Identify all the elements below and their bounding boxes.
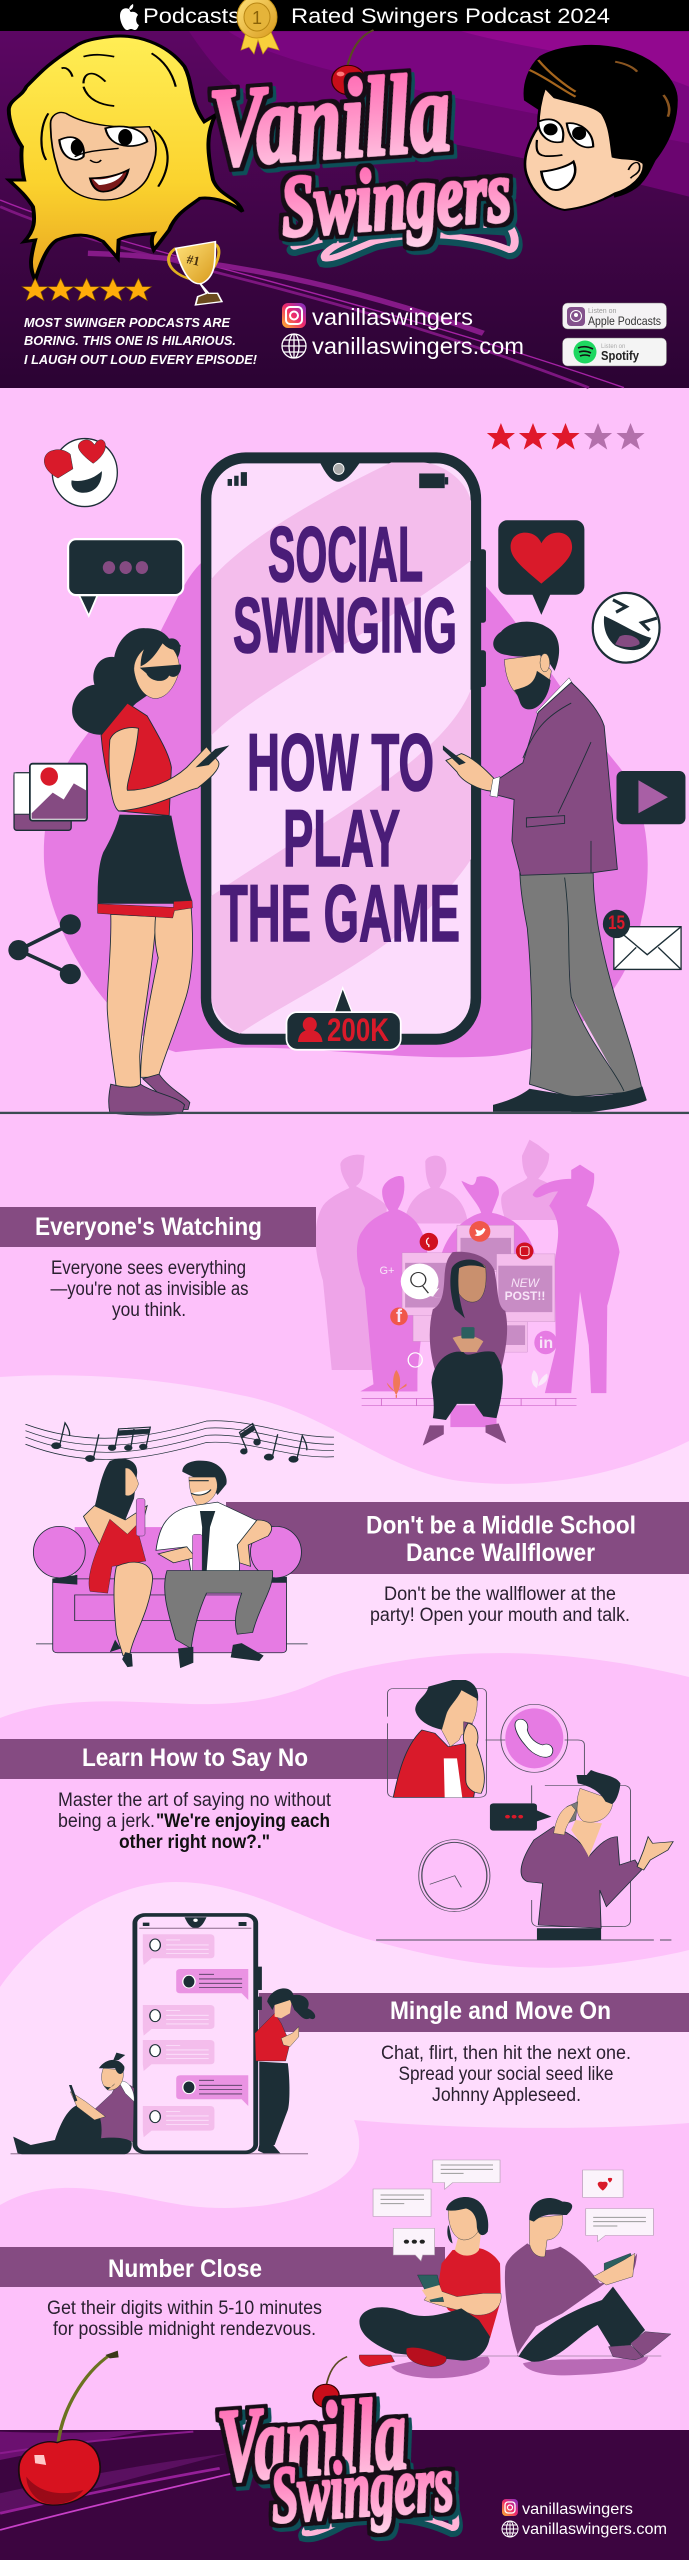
pink blob (44, 552, 648, 1057)
phone (135, 1915, 262, 2152)
body text: other right now?." (119, 1832, 270, 1853)
hero title: HOW TO (247, 718, 434, 808)
man on sofa (156, 1461, 273, 1668)
legs (107, 914, 156, 1089)
logo word: Swingers: Swingers (278, 143, 514, 256)
typing bubble (490, 1803, 551, 1831)
black award bar (0, 0, 689, 31)
logo word: Swingers: Swingers (268, 2439, 456, 2540)
body text: Get their digits within 5-10 minutes (47, 2298, 322, 2319)
hooded girl (423, 1252, 507, 1446)
body text (47, 2298, 322, 2340)
heading band: Everyone's Watching (0, 1207, 316, 1247)
icon: social bubbles (390, 1221, 557, 1367)
body text: Spread your social seed like (398, 2064, 614, 2085)
follower badge (286, 988, 401, 1050)
text: website: vanillaswingers.com (522, 2521, 667, 2538)
hand and phone (446, 754, 494, 791)
woman (359, 2197, 501, 2367)
icon: big cherry (19, 2351, 119, 2505)
text: instagram handle: vanillaswingers (312, 304, 473, 330)
badge: Apple Podcasts (562, 303, 666, 329)
panel: Number Close (0, 2160, 671, 2378)
panel: Wallflower (25, 1421, 689, 1668)
icon: typing bubble (68, 539, 183, 616)
woman figure (72, 628, 229, 1115)
illustration: couple on sofa with music (25, 1421, 334, 1668)
logo cherry (313, 2357, 347, 2408)
body text: Don't be the wallflower at the (384, 1584, 616, 1605)
body text: party! Open your mouth and talk. (370, 1605, 630, 1626)
icon: share (8, 914, 81, 984)
shirt collar (536, 678, 573, 717)
icon: video play (616, 771, 685, 824)
top (101, 703, 171, 816)
icon: globe (502, 2521, 518, 2537)
panel: Learn How to Say No (0, 1680, 673, 1940)
logo swoosh (281, 2504, 456, 2537)
hero title (220, 510, 460, 959)
logo cherry (332, 30, 373, 95)
logo word: Vanilla: Vanilla (206, 50, 454, 191)
man figure (443, 622, 647, 1114)
badge: Apple Podcasts: Apple Podcasts (588, 314, 661, 328)
icon: heart bubble (498, 520, 584, 615)
text: unread count: 15 (608, 913, 625, 934)
footer social handles (502, 2499, 667, 2538)
top banner panel (0, 0, 689, 388)
connector frames (376, 1688, 671, 1940)
jacket (497, 682, 617, 875)
icon: envelope (603, 910, 681, 969)
logo swoosh (294, 225, 515, 262)
panel: Mingle and Move On (11, 1915, 689, 2154)
badge: Spotify (562, 338, 666, 366)
testimonial text: BORING. THIS ONE IS HILARIOUS. (24, 333, 236, 348)
heading band (0, 1739, 415, 1779)
shoes (143, 1074, 190, 1109)
head (134, 642, 179, 699)
heading text (366, 1512, 636, 1567)
logo: Vanilla Swingers footer (215, 2357, 456, 2540)
text: Podcasts: Podcasts (143, 5, 240, 28)
testimonial text: MOST SWINGER PODCASTS ARE (24, 315, 230, 330)
body text: for possible midnight rendezvous. (53, 2319, 316, 2340)
icon: globe (282, 334, 306, 358)
body text: being a jerk. (58, 1811, 155, 1832)
social handles (282, 303, 524, 359)
heading band (259, 1993, 689, 2032)
icon: heart-eyes emoji (44, 439, 117, 507)
post cards (402, 1225, 555, 1352)
illustration: dark-haired cartoon man (525, 46, 677, 210)
footer swoosh (0, 2430, 233, 2530)
hero title: SOCIAL (268, 510, 423, 598)
post card labels: NEW (511, 1276, 541, 1290)
body text: —you're not as invisible as (50, 1279, 248, 1300)
shoes (493, 1087, 647, 1114)
icon: photo cards (14, 764, 87, 830)
heading text: Mingle and Move On (390, 1997, 611, 2025)
footer background (0, 2430, 689, 2560)
purple header background (0, 31, 689, 388)
hero artwork (0, 423, 689, 1115)
testimonial text: I LAUGH OUT LOUD EVERY EPISODE! (24, 352, 258, 367)
illustration: crowd watching hooded girl (316, 1140, 620, 1446)
body text (50, 1258, 248, 1321)
crowd front row (357, 1165, 620, 1393)
trousers (520, 873, 642, 1097)
music notes (51, 1423, 307, 1462)
body text: Everyone sees everything (51, 1258, 246, 1279)
post card labels (380, 1265, 553, 1352)
illustration: phone conversation (376, 1680, 673, 1940)
phone icon circle (501, 1704, 568, 1772)
hero title: SWINGING (233, 581, 457, 669)
body text: "We're enjoying each (156, 1811, 330, 1832)
crowd back row (316, 1140, 571, 1370)
body text: Chat, flirt, then hit the next one. (381, 2043, 631, 2064)
music staff (25, 1421, 334, 1459)
icon: rating stars (22, 278, 152, 301)
hero title: PLAY (283, 794, 400, 884)
icon: apple logo (120, 4, 139, 30)
footer panel (0, 2351, 689, 2560)
background wave: light band two (0, 1882, 689, 2208)
heading: award line (120, 4, 610, 30)
text: website: vanillaswingers.com (312, 333, 524, 359)
hair (72, 628, 180, 735)
hero illustration (0, 423, 689, 1115)
body text (381, 2043, 631, 2106)
man on phone (521, 1770, 673, 1940)
ground line (0, 1112, 689, 1114)
plants and step (362, 1370, 576, 1427)
wall clock (419, 1840, 490, 1912)
shadow and ground (391, 2357, 648, 2378)
illustration: couple texting back to back (359, 2160, 671, 2378)
logo: Vanilla Swingers (206, 30, 515, 262)
sofa (33, 1526, 308, 1653)
body text: Johnny Appleseed. (432, 2085, 581, 2106)
badge: Spotify: Spotify (601, 348, 640, 363)
body text (370, 1584, 630, 1626)
icon: rating stars red (487, 423, 645, 450)
body text: you think. (112, 1300, 186, 1321)
heading text: Don't be a Middle School (366, 1512, 636, 1540)
post card labels: in (539, 1335, 553, 1352)
icon: gold medal: 1 (252, 8, 262, 28)
heading text: Learn How to Say No (82, 1744, 308, 1772)
woman on sofa (83, 1459, 153, 1667)
arm (109, 728, 219, 811)
heading band (0, 2247, 445, 2287)
chat bubbles (143, 1934, 248, 2137)
phone (206, 455, 486, 1039)
illustration: giant phone chat with two people (11, 1915, 315, 2154)
panel: Everyone's Watching (0, 1140, 620, 1446)
heading band: Wallflower (226, 1502, 689, 1574)
badge: Spotify: Listen on (601, 344, 625, 350)
post card labels: f (396, 1306, 403, 1326)
icon: instagram (282, 303, 306, 328)
heading text: Number Close (108, 2255, 262, 2283)
man (505, 2198, 671, 2362)
icon: number one trophy (169, 242, 222, 305)
text: rated line: Rated Swingers Podcast 2024 (291, 5, 610, 28)
body text (58, 1790, 332, 1853)
icon: instagram (502, 2499, 518, 2516)
ground line (11, 2153, 308, 2154)
post card labels: POST!! (505, 1289, 545, 1303)
icon: magnifier bubble (401, 1264, 444, 1299)
illustration: blonde cartoon woman (9, 36, 243, 280)
speech bubbles (373, 2160, 653, 2261)
woman on phone (393, 1680, 484, 1797)
logo word: Vanilla: Vanilla (215, 2376, 410, 2504)
post card labels: G+ (380, 1265, 394, 1277)
badge: Apple Podcasts: Listen on (588, 308, 617, 315)
sitting man (13, 2053, 134, 2154)
text: instagram handle: vanillaswingers (522, 2501, 633, 2518)
icon: laughing emoji (593, 593, 660, 663)
testimonial text (24, 315, 258, 367)
text: follower count: 200K (327, 1012, 389, 1048)
background wave: light band one (0, 1375, 689, 1718)
hero title: THE GAME (220, 869, 460, 959)
skirt (98, 815, 192, 904)
icon: number one trophy: #1 (185, 251, 201, 269)
heading text: Everyone's Watching (35, 1213, 262, 1241)
head (504, 655, 551, 696)
icon: gold medal (237, 0, 279, 54)
standing woman (255, 1988, 315, 2153)
body text: Master the art of saying no without (58, 1790, 332, 1811)
header swooshes (0, 31, 689, 388)
heading text: Dance Wallflower (406, 1539, 595, 1567)
